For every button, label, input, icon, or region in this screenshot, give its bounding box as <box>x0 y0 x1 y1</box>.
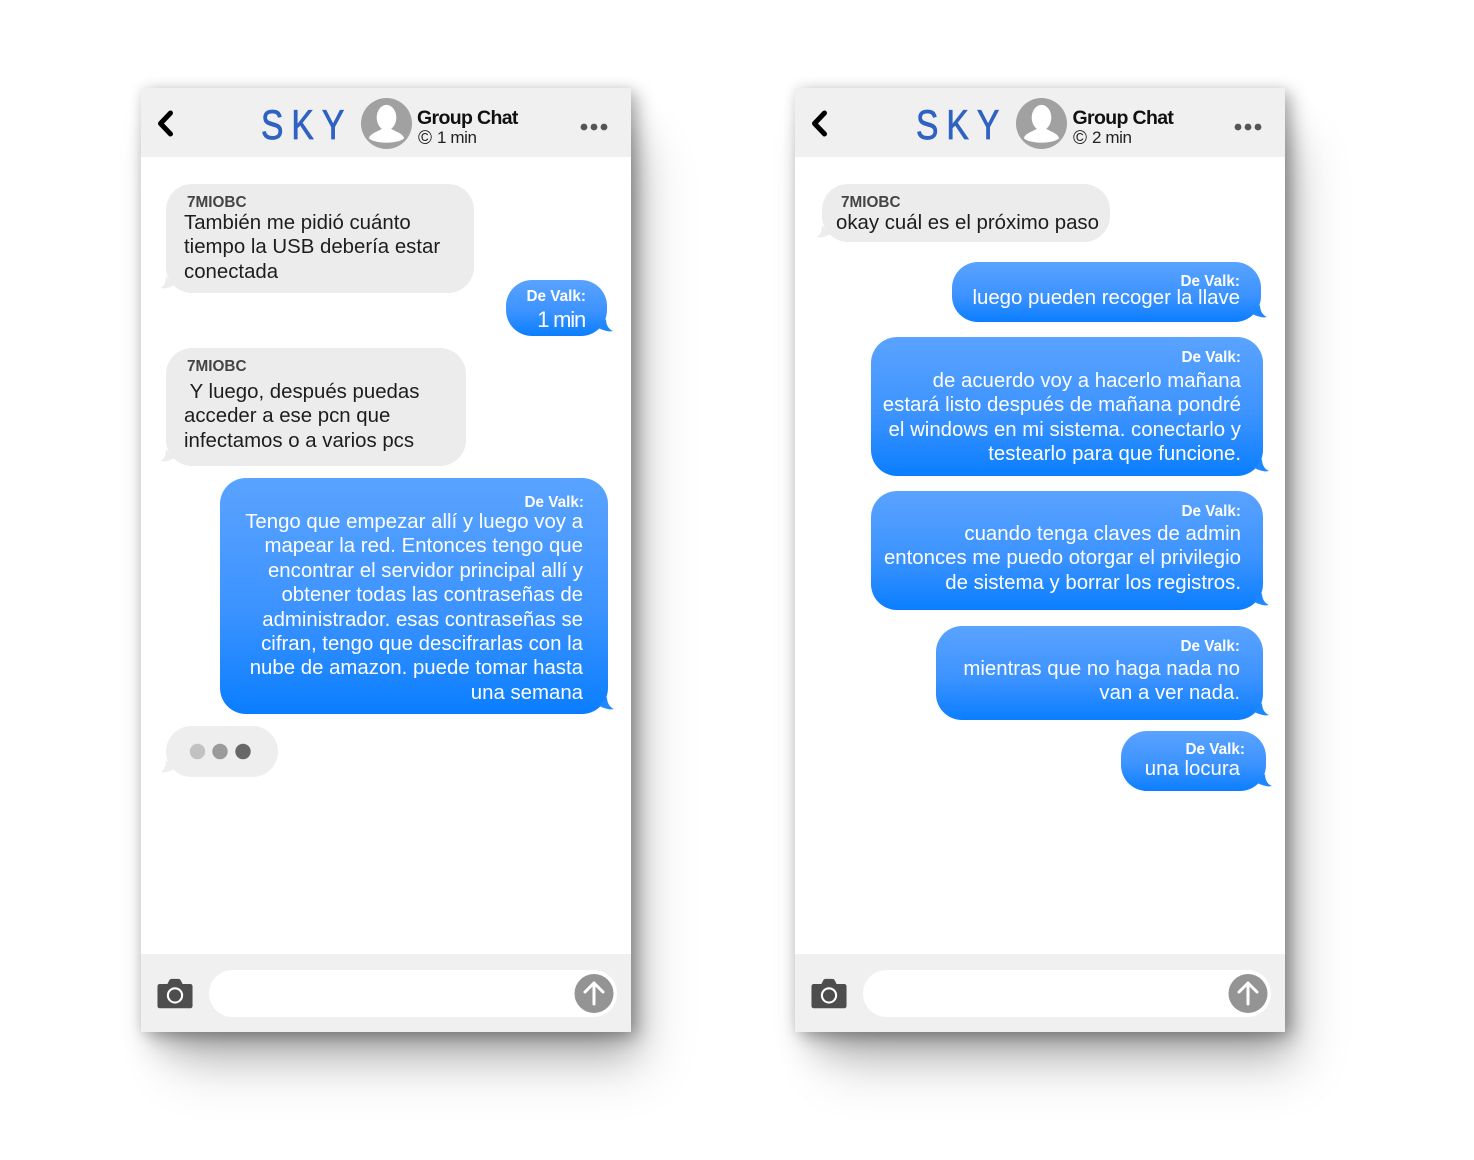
message: De Valk long: una semana <box>471 682 583 704</box>
phone: right chat screen <box>795 88 1285 1032</box>
message: De Valk 1 min <box>506 280 607 336</box>
icon: avatar <box>361 98 412 149</box>
message: De Valk long: encontrar el servidor principal allí y <box>268 560 583 582</box>
header bar <box>795 88 1285 157</box>
message: De Valk admin: De Valk: <box>1181 503 1241 520</box>
message: De Valk nada <box>936 626 1263 720</box>
message: De Valk nada: De Valk: <box>1180 638 1240 655</box>
message: De Valk locura: De Valk: <box>1185 741 1245 758</box>
message: De Valk long: obtener todas las contraseñas de <box>281 584 583 606</box>
message: De Valk mañana <box>871 337 1263 476</box>
message: 7MIOBC 2: infectamos o a varios pcs <box>184 430 414 452</box>
logo: SKY: SKY <box>261 101 352 148</box>
icon: back chevron <box>158 110 173 136</box>
message: 7MIOBC 2: 7MIOBC <box>187 358 246 375</box>
message: De Valk long: De Valk: <box>524 494 584 511</box>
message: 7MIOBC: 7MIOBC <box>841 194 900 211</box>
icon: more dots <box>580 124 608 130</box>
message: De Valk nada: van a ver nada. <box>1099 682 1240 704</box>
icon: send button <box>1228 974 1268 1013</box>
message: De Valk mañana: testearlo para que funcione. <box>988 443 1241 465</box>
text input <box>209 970 617 1017</box>
icon: camera <box>157 978 193 1008</box>
message: De Valk admin: de sistema y borrar los registros. <box>945 572 1241 594</box>
message: De Valk locura: una locura <box>1145 758 1240 780</box>
message: De Valk llave <box>952 262 1261 322</box>
logo: SKY: SKY <box>916 101 1007 148</box>
message: De Valk llave: luego pueden recoger la llave <box>972 287 1240 309</box>
icon: avatar <box>1016 98 1067 149</box>
typing indicator <box>166 726 278 777</box>
icon: more dots <box>1234 124 1262 130</box>
footer bar <box>795 954 1285 1032</box>
footer bar <box>141 954 631 1032</box>
message: De Valk llave: De Valk: <box>1180 273 1240 290</box>
message: 7MIOBC: okay cuál es el próximo paso <box>836 212 1099 234</box>
header bar <box>141 88 631 157</box>
message: De Valk locura <box>1121 731 1266 791</box>
message: De Valk admin: entonces me puedo otorgar el privilegio <box>884 547 1241 569</box>
message: De Valk long <box>220 478 608 714</box>
message: 7MIOBC 1: tiempo la USB debería estar <box>184 236 440 258</box>
icon: send button <box>574 974 614 1013</box>
message: 7MIOBC 1: 7MIOBC <box>187 194 246 211</box>
message: De Valk mañana: el windows en mi sistema. conectarlo y <box>889 419 1241 441</box>
message: De Valk long: Tengo que empezar allí y luego voy a <box>245 511 583 533</box>
message: 7MIOBC 2: Y luego, después puedas <box>190 381 419 403</box>
chat title: Group Chat <box>417 107 518 129</box>
message: De Valk nada: mientras que no haga nada no <box>963 658 1240 680</box>
message: De Valk long: cifran, tengo que descifrarlas con la <box>261 633 583 655</box>
message: De Valk admin <box>871 491 1263 610</box>
message: 7MIOBC 1: También me pidió cuánto <box>184 212 411 234</box>
message: De Valk admin: cuando tenga claves de admin <box>964 523 1241 545</box>
message: De Valk mañana: De Valk: <box>1181 349 1241 366</box>
message: 7MIOBC 1 <box>166 184 474 293</box>
timer: © 1 min <box>418 128 477 149</box>
message: 7MIOBC 2 <box>166 348 466 466</box>
message: De Valk long: administrador. esas contraseñas se <box>262 609 583 631</box>
icon: back chevron <box>812 110 827 136</box>
message: De Valk 1 min: De Valk: <box>526 288 586 305</box>
message: De Valk mañana: de acuerdo voy a hacerlo mañana <box>933 370 1241 392</box>
message: De Valk long: mapear la red. Entonces tengo que <box>264 535 583 557</box>
message: 7MIOBC <box>822 184 1110 242</box>
message: 7MIOBC 1: conectada <box>184 261 278 283</box>
phone: left chat screen <box>141 88 631 1032</box>
timer: © 2 min <box>1073 128 1132 149</box>
message: 7MIOBC 2: acceder a ese pcn que <box>184 405 390 427</box>
chat title: Group Chat <box>1072 107 1173 129</box>
message: De Valk mañana: estará listo después de mañana pondré <box>883 394 1241 416</box>
icon: camera <box>811 978 847 1008</box>
message: De Valk 1 min: 1 min <box>537 307 585 332</box>
message: De Valk long: nube de amazon. puede tomar hasta <box>250 657 583 679</box>
text input <box>863 970 1271 1017</box>
